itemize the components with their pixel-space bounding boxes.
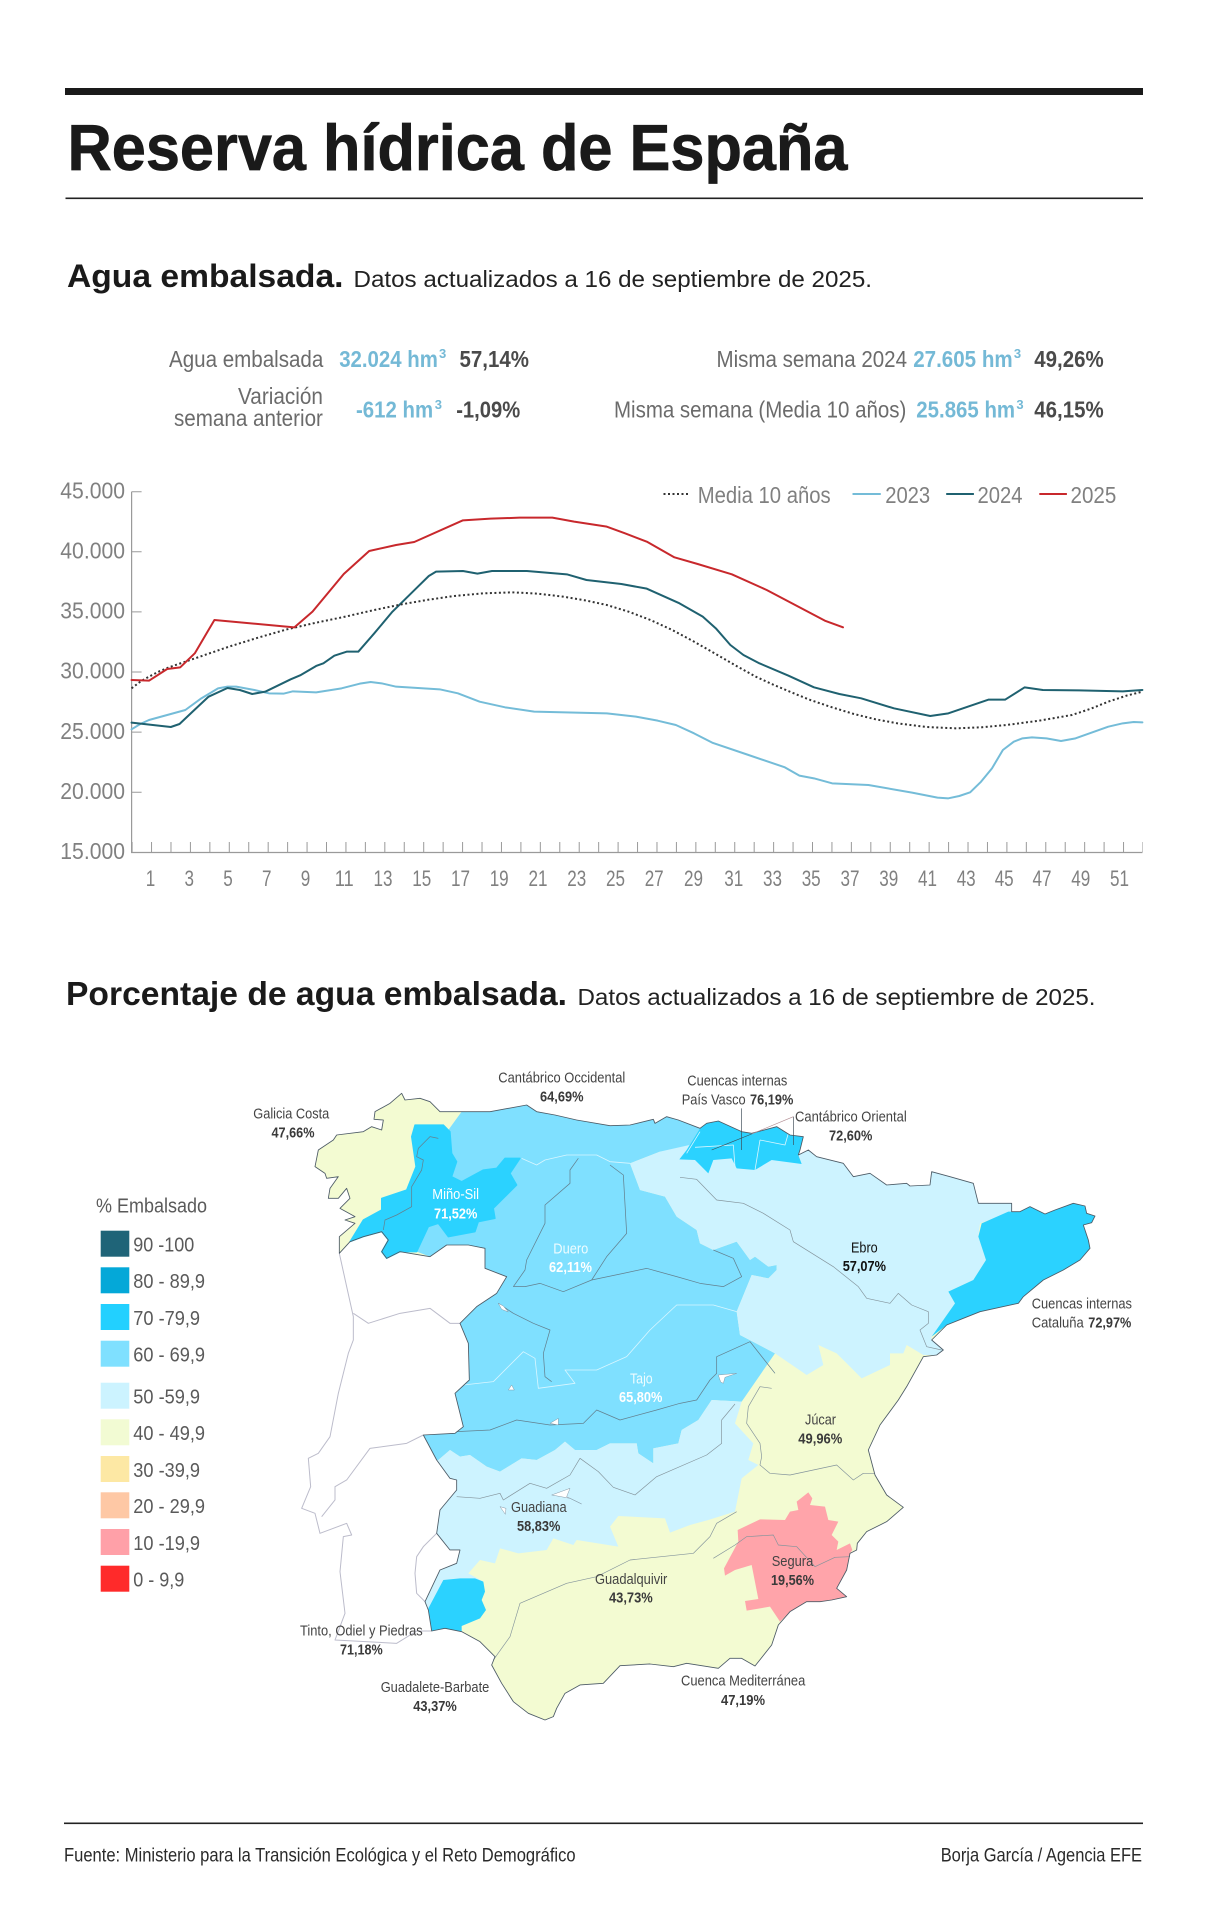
portugal outline <box>302 1253 460 1643</box>
x axis labels: 27 <box>645 866 664 891</box>
source: Fuente: Ministerio para la Transición Ecológica y el Reto Demográfico <box>64 1844 576 1866</box>
label: Tajo: 65,80% <box>619 1390 662 1406</box>
stat: misma semana media 10 años: 25.865 hm <box>916 397 1015 423</box>
label: Segura: Segura <box>772 1554 814 1570</box>
stat: variación semana anterior: -612 hm <box>356 397 433 423</box>
heading: agua embalsada: Datos actualizados a 16 de septiembre de 2025. <box>354 266 872 292</box>
label: Tinto, Odiel y Piedras <box>300 1623 423 1658</box>
x axis labels: 31 <box>724 866 743 891</box>
line: 2024 <box>132 571 1142 727</box>
stat: variación semana anterior: -1,09% <box>456 397 520 423</box>
line: media 10 años <box>132 592 1142 728</box>
stat: misma semana 2024 <box>716 346 1104 372</box>
stat: agua embalsada: 57,14% <box>460 346 529 372</box>
x axis labels: 7 <box>262 866 272 891</box>
internal boundaries <box>463 1132 788 1388</box>
label: Guadalquivir: 43,73% <box>609 1591 653 1607</box>
label: Ebro <box>843 1240 886 1275</box>
label: Duero: 62,11% <box>549 1260 592 1276</box>
stat: misma semana media 10 años: 3 <box>1016 397 1024 412</box>
label: Miño-Sil: 71,52% <box>434 1206 477 1222</box>
line: 2025 <box>132 518 843 681</box>
chart lines <box>132 518 1142 798</box>
label: Cuencas internas Cataluña <box>1032 1296 1132 1331</box>
y axis labels: 35.000 <box>60 598 125 624</box>
rivers <box>383 1137 942 1660</box>
region: Segura <box>724 1492 852 1622</box>
y axis labels: 15.000 <box>60 838 125 864</box>
x axis labels: 33 <box>763 866 782 891</box>
line: 2023 <box>132 682 1142 798</box>
heading: porcentaje de agua embalsada: Datos actualizados a 16 de septiembre de 2025. <box>578 984 1096 1010</box>
legend: % embalsado: 0 - 9,9 <box>133 1570 184 1592</box>
label: Segura <box>771 1554 814 1589</box>
label: Duero <box>549 1241 592 1276</box>
label: Cantábrico Oriental <box>795 1110 907 1144</box>
label: Ebro: 57,07% <box>843 1259 886 1275</box>
chart legend <box>664 482 1116 508</box>
coastline outline <box>315 1093 1095 1720</box>
stat: variación semana anterior: Variación <box>238 383 323 409</box>
label: Guadalquivir <box>595 1572 667 1607</box>
stat: misma semana 2024: Misma semana 2024 <box>716 346 907 372</box>
region: Cuencas internas Cataluña <box>932 1203 1095 1337</box>
y axis labels: 45.000 <box>60 477 125 503</box>
legend: % embalsado: 20 - 29,9 <box>133 1496 205 1518</box>
title: Reserva hídrica de España <box>68 111 848 184</box>
stat: misma semana media 10 años <box>614 397 1104 423</box>
x axis labels: 41 <box>918 866 937 891</box>
label: Guadalquivir: Guadalquivir <box>595 1572 667 1588</box>
stat: variación semana anterior: 3 <box>435 397 442 412</box>
legend: % embalsado: 60 - 69,9 <box>133 1344 205 1366</box>
label: Cuencas internas Cataluña: Cataluña <box>1032 1315 1085 1331</box>
x axis labels: 29 <box>684 866 703 891</box>
stat: agua embalsada: Agua embalsada <box>169 346 323 372</box>
x axis labels: 39 <box>879 866 898 891</box>
label: Cantábrico Occidental: Cantábrico Occidental <box>498 1071 625 1087</box>
x axis labels: 19 <box>490 866 509 891</box>
legend: % embalsado: 80 - 89,9 <box>133 1271 205 1293</box>
label: Tinto, Odiel y Piedras: 71,18% <box>340 1642 383 1658</box>
x axis labels: 21 <box>528 866 548 891</box>
label: Segura: 19,56% <box>771 1573 814 1589</box>
y axis labels: 40.000 <box>60 538 125 564</box>
chart legend: 2025 <box>1070 482 1116 508</box>
label: Júcar: Júcar <box>805 1413 836 1429</box>
x axis labels: 1 <box>146 866 155 891</box>
y axis labels: 30.000 <box>60 658 125 684</box>
x axis labels <box>146 866 1129 891</box>
x axis labels: 13 <box>374 866 392 891</box>
x axis labels: 3 <box>184 866 194 891</box>
label: Cuencas internas País Vasco: Cuencas internas <box>687 1073 787 1089</box>
legend: % embalsado: 10 -19,9 <box>133 1533 200 1555</box>
y axis labels <box>60 477 125 864</box>
label: Cantábrico Occidental: 64,69% <box>540 1090 584 1106</box>
region: Miño-Sil <box>350 1125 520 1258</box>
label: Galicia Costa <box>253 1106 330 1142</box>
x axis labels: 5 <box>223 866 233 891</box>
x axis labels: 17 <box>451 866 470 891</box>
legend: % embalsado: 50 -59,9 <box>133 1386 200 1408</box>
x axis labels: 51 <box>1110 866 1129 891</box>
label: Guadalete-Barbate: Guadalete-Barbate <box>381 1680 489 1696</box>
label: Guadalete-Barbate: 43,37% <box>413 1699 457 1715</box>
legend: % embalsado: 30 -39,9 <box>133 1460 200 1482</box>
label: Duero: Duero <box>553 1241 588 1257</box>
x axis labels: 9 <box>301 866 310 891</box>
y axis labels: 20.000 <box>60 778 125 804</box>
reservoirs <box>498 1303 737 1514</box>
stat: misma semana media 10 años: Misma semana (Media 10 años) <box>614 397 906 423</box>
heading: porcentaje de agua embalsada <box>66 975 1096 1012</box>
map labels <box>253 1071 1132 1715</box>
legend: % embalsado: % Embalsado <box>96 1196 207 1218</box>
label: Miño-Sil: Miño-Sil <box>432 1187 479 1203</box>
region: Cantábrico Occidental, Duero y Tajo <box>417 1105 777 1472</box>
label: Cantábrico Oriental: Cantábrico Oriental <box>795 1110 907 1126</box>
region: Cuencas internas País Vasco y Cantábrico Oriental <box>679 1121 803 1173</box>
label: Cuenca Mediterránea: 47,19% <box>721 1693 765 1709</box>
label: Guadiana: Guadiana <box>511 1500 568 1516</box>
label: Guadiana <box>511 1500 568 1535</box>
x axis labels: 15 <box>412 866 431 891</box>
x axis labels: 47 <box>1032 866 1052 891</box>
label: Cuencas internas País Vasco <box>682 1073 793 1108</box>
stat: misma semana 2024: 27.605 hm <box>913 346 1013 372</box>
label: Tajo <box>619 1371 662 1406</box>
label: Júcar <box>798 1413 842 1447</box>
x axis labels: 37 <box>840 866 860 891</box>
label: Cantábrico Occidental <box>498 1071 625 1106</box>
label: Cuenca Mediterránea: Cuenca Mediterránea <box>681 1674 806 1690</box>
stat: variación semana anterior: semana anterior <box>174 405 323 431</box>
heading: agua embalsada: Agua embalsada. <box>67 258 344 294</box>
legend: % embalsado: 40 - 49,9 <box>133 1423 205 1445</box>
region: Guadiana <box>425 1400 758 1610</box>
x axis labels: 45 <box>995 866 1014 891</box>
stat: misma semana 2024: 3 <box>1014 346 1021 361</box>
label: Cantábrico Oriental: 72,60% <box>829 1128 872 1144</box>
x axis labels: 23 <box>567 866 586 891</box>
label: Cuencas internas País Vasco: País Vasco <box>682 1092 746 1108</box>
stat: misma semana 2024: 49,26% <box>1034 346 1104 372</box>
label: Galicia Costa: 47,66% <box>272 1126 315 1142</box>
legend: % embalsado: 70 -79,9 <box>133 1308 200 1330</box>
label: Guadalete-Barbate <box>381 1680 489 1715</box>
label: Tajo: Tajo <box>630 1371 653 1387</box>
leader lines <box>712 1108 793 1150</box>
heading: agua embalsada <box>67 258 872 294</box>
y axis labels: 25.000 <box>60 718 125 744</box>
stats panel <box>169 346 1104 431</box>
chart legend: 2024 <box>978 482 1023 508</box>
stat: agua embalsada: 32.024 hm <box>339 346 438 372</box>
stat: agua embalsada: 3 <box>439 346 446 361</box>
label: Cuenca Mediterránea <box>681 1674 806 1709</box>
label: Galicia Costa: Galicia Costa <box>253 1106 330 1122</box>
region: Ebro <box>630 1143 1012 1378</box>
label: Júcar: 49,96% <box>798 1431 842 1447</box>
region: Tinto, Odiel y Piedras <box>428 1578 486 1632</box>
label: Miño-Sil <box>432 1187 479 1222</box>
label: Cuencas internas Cataluña: Cuencas internas <box>1032 1296 1132 1312</box>
label: Cuencas internas País Vasco: 76,19% <box>750 1092 793 1108</box>
x axis labels: 25 <box>606 866 625 891</box>
axes <box>132 492 1143 852</box>
line chart <box>60 477 1143 891</box>
legend: % embalsado <box>96 1196 207 1592</box>
x axis labels: 49 <box>1071 866 1090 891</box>
stat: misma semana media 10 años: 46,15% <box>1034 397 1104 423</box>
x axis labels: 43 <box>957 866 976 891</box>
label: Cuencas internas Cataluña: 72,97% <box>1088 1315 1131 1331</box>
heading: porcentaje de agua embalsada: Porcentaje de agua embalsada. <box>66 975 567 1012</box>
label: Ebro: Ebro <box>851 1240 878 1256</box>
credit: Borja García / Agencia EFE <box>941 1844 1142 1866</box>
label: Tinto, Odiel y Piedras: Tinto, Odiel y Piedras <box>300 1623 423 1639</box>
stat: variación semana anterior <box>174 383 520 431</box>
stat: agua embalsada <box>169 346 529 372</box>
chart legend: Media 10 años <box>698 482 831 508</box>
region: Spain base (Galicia Costa, Júcar, Guadalquivir, Mediterránea) <box>315 1093 1095 1720</box>
x axis labels: 35 <box>802 866 821 891</box>
map of Spain <box>253 1071 1132 1720</box>
label: Guadiana: 58,83% <box>517 1519 560 1535</box>
legend: % embalsado: 90 -100 <box>133 1234 194 1256</box>
x axis labels: 11 <box>335 866 354 891</box>
chart legend: 2023 <box>885 482 930 508</box>
